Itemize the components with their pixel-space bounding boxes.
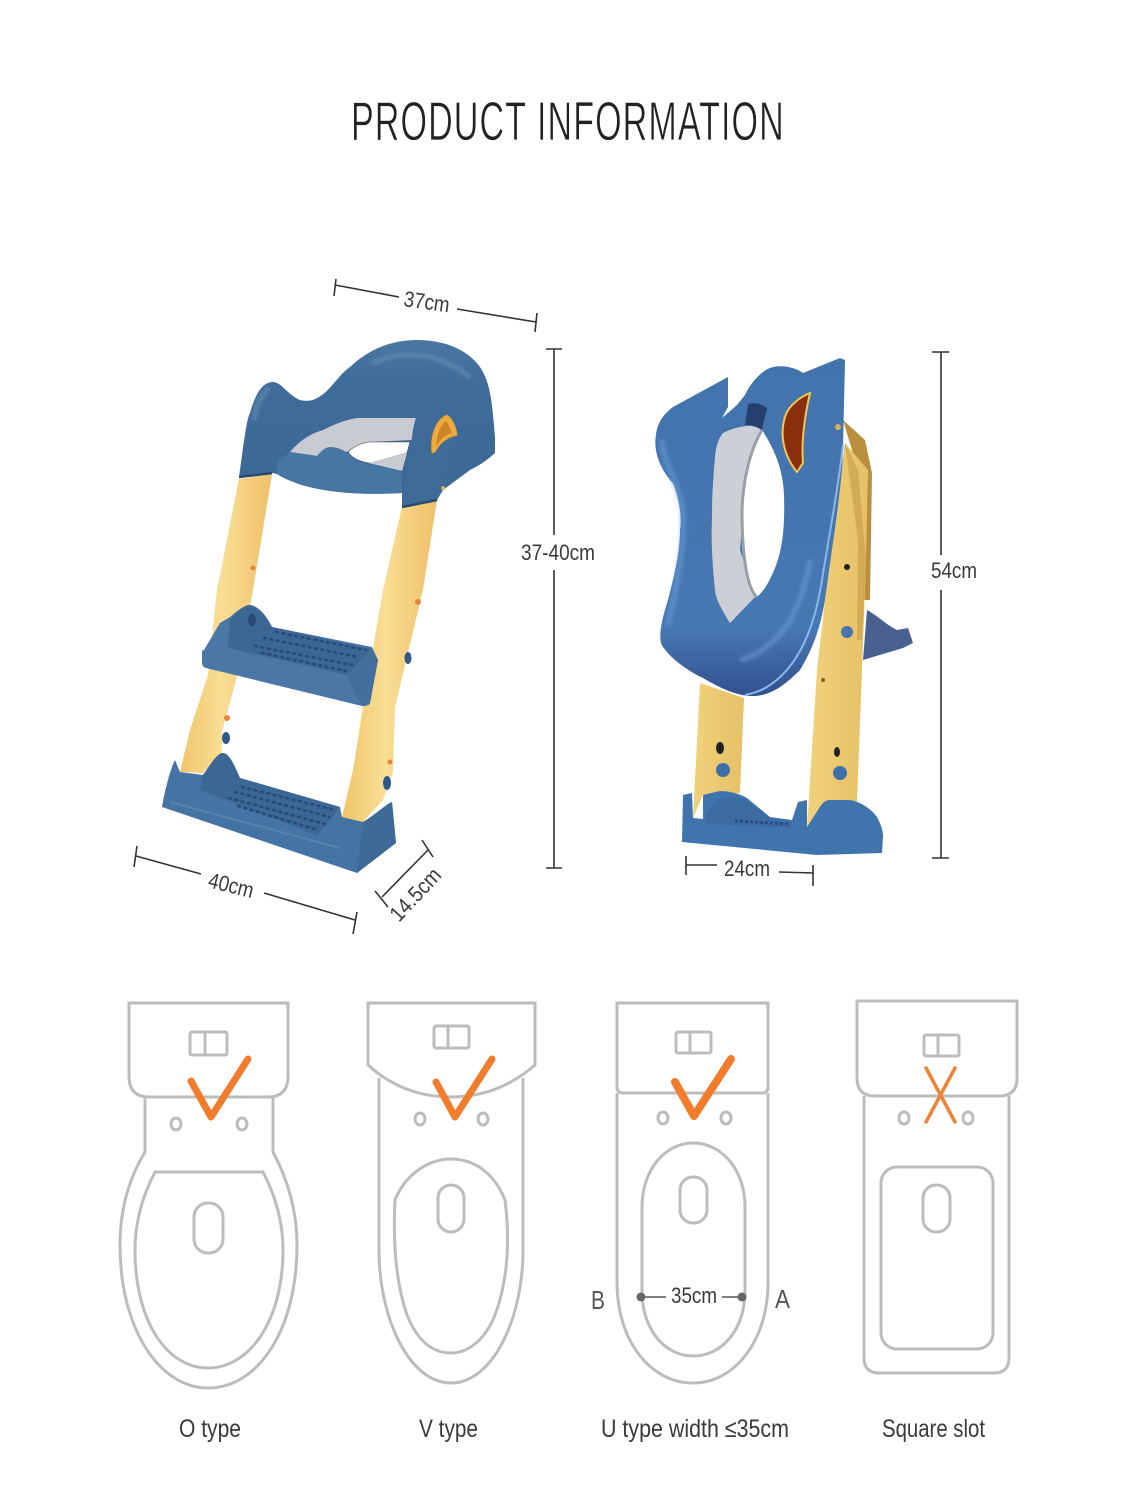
dimension: depth 14.5cm — [375, 840, 446, 926]
folded base — [682, 791, 883, 855]
toilet: U type — [617, 1003, 768, 1383]
folded step behind — [863, 610, 913, 660]
cross mark — [926, 1068, 955, 1122]
folded seat rim line — [745, 445, 843, 695]
dimension: folded depth 24cm — [686, 856, 813, 886]
folded seat body — [655, 358, 845, 696]
width marker 35cm: B — [591, 1285, 605, 1315]
base dots — [229, 787, 335, 830]
folded back frame — [843, 420, 872, 600]
dimension: folded height 54cm — [931, 352, 977, 858]
upper step tread — [228, 605, 372, 675]
dimension: height 37-40cm — [521, 349, 595, 868]
seat body — [239, 340, 495, 507]
toilet: O type — [120, 1003, 297, 1388]
label: O type: O type — [179, 1415, 241, 1443]
check mark — [675, 1059, 731, 1116]
dimension: depth 14.5cm: 14.5cm — [384, 863, 446, 926]
seat highlights — [254, 355, 470, 420]
seat grey pad — [290, 418, 417, 456]
folded rail holes and pins — [716, 564, 853, 780]
ladder right rail — [342, 500, 437, 823]
label: V type: V type — [419, 1415, 478, 1443]
seat opening — [348, 442, 410, 463]
dimension: top width 37cm — [334, 279, 537, 332]
folded seat bridge hollow — [745, 403, 767, 430]
dimension: height 37-40cm: 37-40cm — [521, 540, 595, 565]
check mark — [191, 1059, 248, 1117]
width marker 35cm: A — [775, 1284, 791, 1314]
title: PRODUCT INFORMATION — [351, 91, 784, 152]
upper step — [202, 605, 378, 706]
toilet: V type — [368, 1003, 535, 1383]
ladder left rail — [180, 474, 272, 773]
base right end — [357, 802, 396, 873]
dimension: top width 37cm: 37cm — [402, 286, 451, 317]
product: step stool front view — [162, 340, 495, 873]
base step — [162, 753, 396, 873]
rail dots and pins — [222, 566, 421, 790]
width marker 35cm: 35cm — [671, 1283, 717, 1308]
width marker 35cm — [591, 1283, 791, 1315]
folded seat highlight — [662, 440, 810, 660]
upper step bolt — [248, 614, 256, 626]
ear rivet — [441, 486, 445, 490]
seat front rim — [277, 447, 402, 494]
label: U type: U type width ≤35cm — [601, 1415, 789, 1443]
dimension: base width 40cm — [134, 846, 357, 934]
folded seat handle — [783, 393, 810, 472]
dimension: folded height 54cm: 54cm — [931, 558, 977, 583]
handle cutout — [432, 415, 457, 453]
product: step stool folded side view — [655, 358, 913, 855]
folded base tread — [705, 797, 792, 828]
folded seat grey pad — [712, 426, 762, 623]
seat right ear — [402, 403, 458, 507]
folded right rail — [807, 443, 868, 827]
dimension: folded depth 24cm: 24cm — [724, 856, 770, 881]
folded left rail — [693, 683, 744, 818]
check mark — [436, 1059, 492, 1117]
dimension: base width 40cm: 40cm — [206, 868, 256, 903]
folded seat opening — [742, 430, 784, 597]
toilet: square slot — [857, 1001, 1017, 1373]
label: Square slot: Square slot — [882, 1415, 985, 1443]
base tread — [200, 753, 340, 835]
upper step dots — [255, 632, 366, 671]
